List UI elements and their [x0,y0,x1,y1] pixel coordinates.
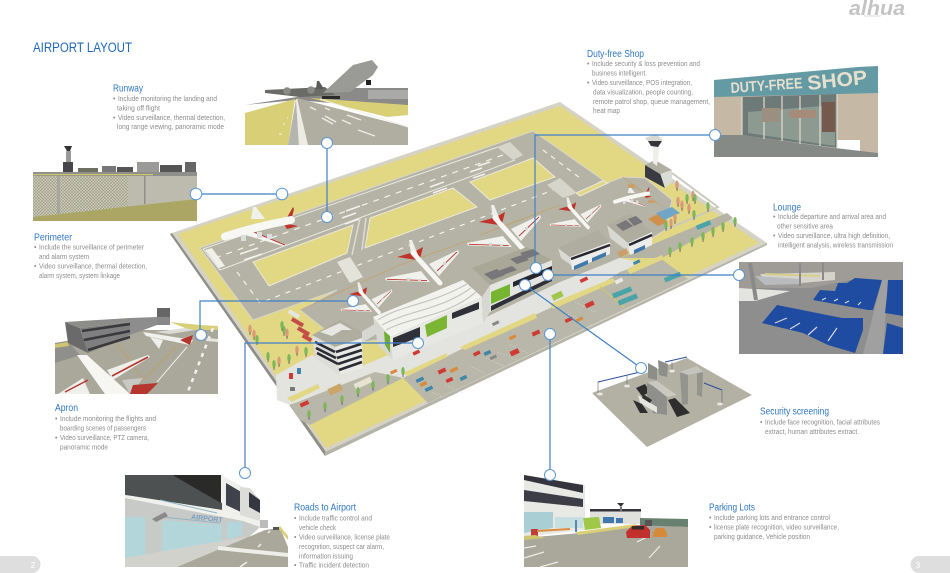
text: parking lots [709,502,839,541]
photo: duty-free shop: SHOP [806,67,868,95]
text: lounge: Include departure and arrival area and [778,214,886,221]
text: lounge: other sensitive area [777,224,833,230]
page tab right [910,556,950,573]
tower and buildings on horizon [63,146,196,172]
containers [648,207,680,226]
text: roads to airport: • [294,534,297,542]
text: lounge: intelligent analysis, wireless transmission [778,242,893,250]
photo: parking lots [524,475,688,567]
text: roads to airport: • [294,562,297,570]
text: perimeter: and alarm system [39,254,89,261]
text: runway [113,84,225,131]
plane at gate [143,328,195,349]
page tab left: 2 [31,561,36,570]
planes on apron [341,197,601,312]
text: perimeter: • [34,244,37,252]
text: duty-free shop [587,49,710,115]
plane near control tower [615,187,652,206]
text: duty-free shop: Video surveillance, POS integration, [592,80,692,87]
airplane over runway [265,60,378,99]
text: perimeter: Video surveillance, thermal detection, [39,264,147,270]
text: parking lots: • [709,515,712,522]
text: apron: Apron [55,403,78,414]
text: roads to airport: Traffic incident detection [299,562,369,570]
text: perimeter [34,232,147,280]
title: AIRPORT LAYOUT [33,40,132,55]
text: security screening: extract, human attributes extract. [765,429,859,436]
text: apron: • [55,435,58,442]
text: roads to airport [294,502,390,570]
lounge connector [542,270,744,280]
text: lounge: Lounge [773,202,801,214]
page tab right: 3 [916,561,921,570]
text: roads to airport: Roads to Airport [294,502,356,514]
text: lounge: • [773,214,776,221]
wall and lot edge [665,173,718,230]
text: security screening: • [760,420,763,426]
photo: roads to airport [125,475,288,567]
text: apron: boarding scenes of passengers [60,426,146,432]
runway markings [203,142,660,310]
text: duty-free shop: business intelligent. [592,70,647,78]
text: parking lots: Parking Lots [709,502,755,514]
text: runway: Runway [113,84,143,94]
text: runway: • [113,96,116,103]
photo: runway [245,60,408,145]
text: duty-free shop: remote patrol shop, queue management, [593,99,710,106]
right side buildings [558,213,652,270]
text: lounge: Video surveillance, ultra high definition, [778,233,890,240]
runway connector [322,138,332,222]
text: roads to airport: vehicle check [299,525,336,532]
text: apron: Video surveillance, PTZ camera, [60,435,149,442]
text: parking lots: • [709,524,712,532]
photo: security screening [592,357,752,447]
perimeter connector [190,188,288,200]
photo: duty-free shop: DUTY-FREE [730,75,803,97]
foreground plane [58,355,158,394]
text: runway: long range viewing, panoramic mode [117,124,224,131]
connector lines and nodes [190,130,744,480]
text: duty-free shop: • [587,61,590,68]
text: runway: Video surveillance, thermal detection, [118,115,225,122]
runway and apron surface [200,131,672,345]
duty-free connector [530,130,720,274]
text: duty-free shop: Duty-free Shop [587,49,644,60]
text: runway: taking off flight [117,106,160,112]
text: roads to airport: Video surveillance, license plate [299,534,390,542]
text: runway: Include monitoring the landing and [118,96,217,103]
photo: duty-free shop [714,66,878,157]
text: duty-free shop: data visualization, people counting, [593,90,693,96]
parking garage building [312,320,363,375]
text: security screening [760,406,880,436]
isometric airport model [170,102,767,456]
text: security screening: Security screening [760,406,829,418]
text: apron: • [55,416,58,423]
photo: lounge [739,262,903,354]
text: duty-free shop: Include security & loss prevention and [592,61,700,68]
connector bridge [356,322,380,345]
cargo on apron [617,184,655,258]
text: perimeter: Include the surveillance of perimeter [39,244,145,252]
yellow grass islands [253,158,608,286]
red vehicles on left apron [288,309,312,342]
cars in lot [626,525,667,538]
security connector [520,280,646,374]
text: apron [55,403,156,452]
text: roads to airport: Include traffic control and [299,516,372,522]
vehicles [289,220,711,408]
logo: TECHNOLOGY [864,15,882,18]
text: roads to airport: information issuing [299,554,353,560]
photo: perimeter [33,146,197,221]
text: apron: panoramic mode [60,444,108,452]
trees [248,180,737,420]
text: security screening: Include face recognition, facial attributes [765,420,880,426]
text: lounge: • [773,233,776,240]
second terminal [472,247,552,323]
text: parking lots: Include parking lots and entrance control [714,515,830,522]
text: parking lots: license plate recognition, video surveillance, [714,524,839,532]
text: duty-free shop: • [587,80,590,87]
control tower [645,134,672,188]
main terminal [373,280,483,360]
parking connector [544,328,556,480]
text: parking lots: parking guidance, Vehicle position [714,534,810,541]
text: roads to airport: • [294,516,297,522]
pavement and parking [276,213,733,425]
photo: roads to airport: AIRPORT [191,514,224,524]
plane on runway [225,207,298,246]
text: runway: • [113,115,116,122]
text: perimeter: Perimeter [34,232,73,244]
roads connector [240,338,424,478]
text: perimeter: • [34,264,37,270]
text: perimeter: alarm system, system linkage [39,273,120,280]
text: lounge [773,202,893,250]
text: roads to airport: recognition, suspect car alarm, [299,544,384,551]
text: apron: Include monitoring the flights and [60,416,156,423]
apron connector [196,296,358,340]
page tab left [0,556,40,573]
text: duty-free shop: heat map [593,108,620,115]
photo: apron [55,308,218,394]
